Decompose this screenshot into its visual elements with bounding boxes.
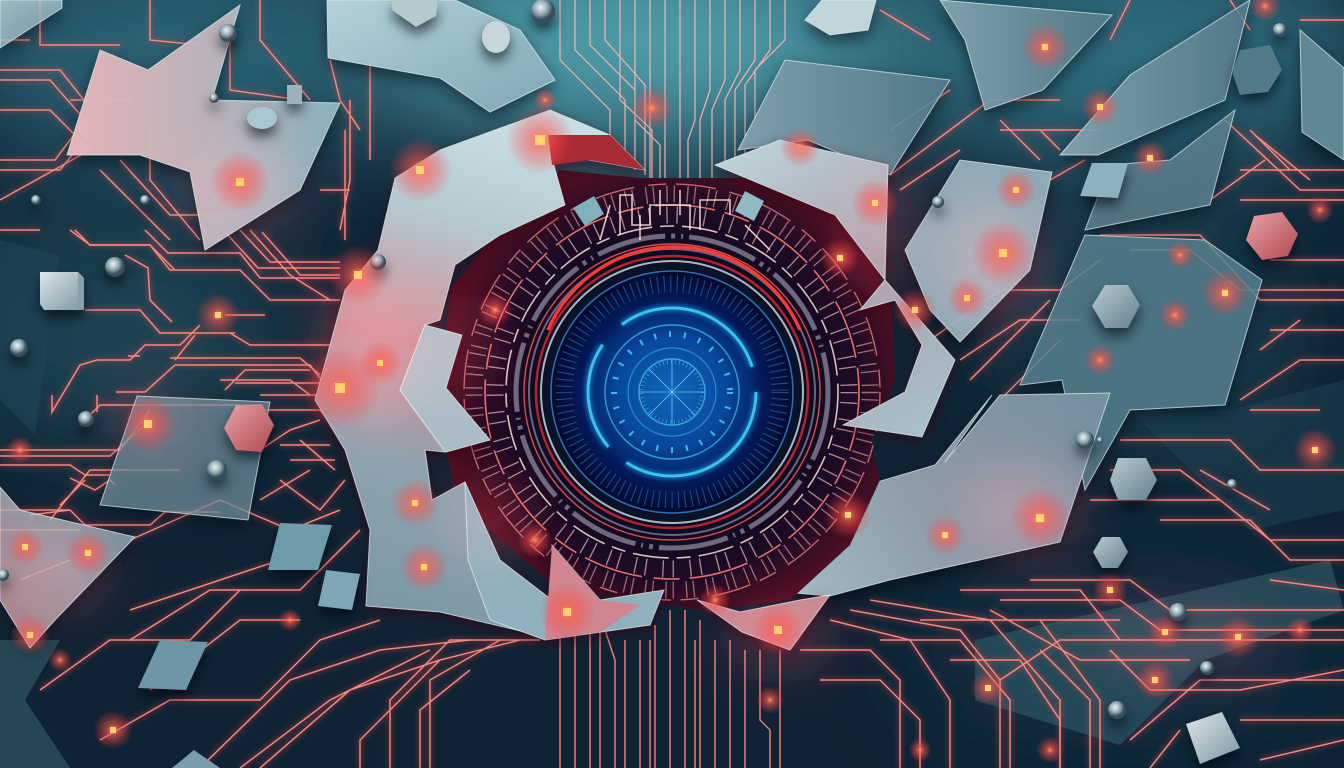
- petal: large left: [315, 110, 645, 632]
- panel: top-centre shard: [327, 0, 555, 112]
- rounded stud: top-left: [247, 107, 277, 129]
- petal: bottom: [697, 595, 830, 650]
- petal: left curl: [400, 325, 490, 452]
- central circuit disc: [440, 170, 895, 610]
- circuit traces: bottom centre bundle: [560, 610, 780, 768]
- circuit traces: top centre bundle: [560, 0, 785, 178]
- cube: top-left small: [287, 85, 302, 104]
- panel: small top shard: [805, 0, 876, 35]
- bright traces above the lens: [600, 190, 770, 250]
- panel: lower-right shard: [760, 393, 1110, 596]
- nut: right grey upper: [1092, 285, 1140, 328]
- panel: upper-right shard: [940, 0, 1112, 110]
- petal: lower left: [465, 482, 664, 640]
- panel: right-hand connecting shard: [1085, 110, 1235, 230]
- petal: lower centre glow: [545, 545, 640, 640]
- petal: upper right: [715, 140, 955, 437]
- flower petals around the disc: [315, 110, 955, 650]
- cube: lower-left small: [318, 570, 360, 610]
- cube: bottom: [172, 750, 220, 768]
- cube: left: [40, 272, 84, 310]
- panel: top-left corner: [0, 0, 62, 48]
- red and steel lens rim: [536, 247, 808, 528]
- panel: right shard: [1060, 0, 1250, 155]
- panel: upper centre-right shard: [738, 60, 950, 175]
- nut: top right: [1232, 45, 1282, 95]
- panel: top-left large shard: [67, 5, 340, 250]
- cube: lower-left teal: [138, 640, 208, 690]
- cube: right panel: [1080, 163, 1128, 198]
- nut: right pink: [1246, 212, 1298, 260]
- cylinder stud: top: [482, 21, 510, 53]
- disc: bumped maze base: [440, 170, 895, 610]
- cube: lower-left blue: [268, 523, 332, 570]
- nut: left pink: [224, 404, 274, 452]
- cyan glow: [588, 308, 756, 476]
- cube: top: [392, 0, 438, 27]
- panel: right large shard: [1020, 235, 1262, 490]
- panel: lower-left shard: [0, 487, 135, 648]
- panel: right petal: [905, 160, 1052, 342]
- panel: far right shard: [1300, 30, 1344, 160]
- panel: left lower shard: [100, 396, 270, 520]
- cube: bottom right: [1186, 712, 1240, 764]
- red atmospheric glow: [10, 150, 1270, 675]
- petal: curled red edge: [548, 135, 645, 170]
- small square inserts in the ring: [573, 196, 604, 226]
- cyan arcs: [588, 308, 756, 476]
- nut: right grey lower: [1093, 537, 1128, 568]
- maze rings: [464, 184, 880, 600]
- lens tick marks: [564, 284, 780, 500]
- blue lens: [551, 271, 793, 513]
- nut: right grey middle: [1110, 458, 1157, 500]
